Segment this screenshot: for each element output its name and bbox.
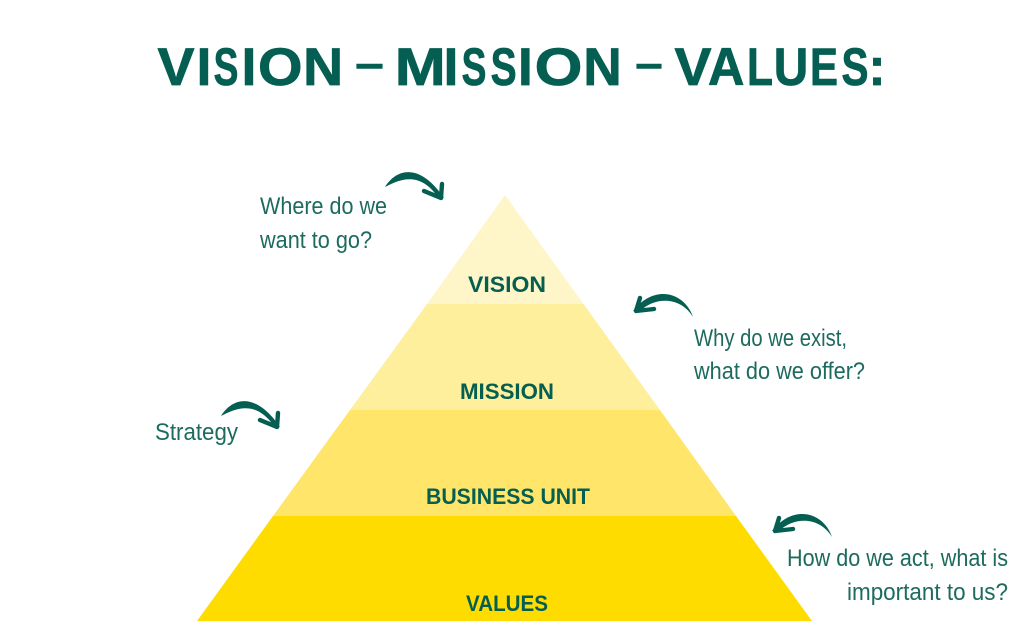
arrow: to values <box>772 514 832 537</box>
title: I <box>444 38 458 97</box>
pyramid tier: business unit: BUSINESS UNIT <box>426 484 591 509</box>
title: S <box>491 38 517 97</box>
title: N <box>583 38 622 97</box>
text: why do we exist <box>693 325 865 385</box>
title: A <box>708 38 744 97</box>
arrow: to business unit <box>221 401 280 427</box>
pyramid tier: business unit <box>273 410 736 516</box>
pyramid tier: mission <box>350 304 660 410</box>
callout: where do we want to go <box>259 172 444 254</box>
callout: how do we act <box>772 514 1008 606</box>
title: U <box>774 38 808 97</box>
title: : <box>868 38 886 97</box>
callout: why do we exist <box>633 294 865 385</box>
title: S <box>462 38 486 97</box>
text: where do we want to go: Where do we <box>260 193 387 220</box>
title: O <box>535 38 582 97</box>
title: S <box>214 38 238 97</box>
text: where do we want to go: want to go? <box>259 227 372 254</box>
pyramid tier: values <box>197 516 812 621</box>
title: L <box>747 38 773 97</box>
pyramid tier: values: VALUES <box>466 591 548 616</box>
text: how do we act: important to us? <box>847 579 1008 606</box>
pyramid tier: vision: VISION <box>468 272 546 297</box>
text: how do we act <box>787 545 1008 606</box>
pyramid tier: vision <box>427 195 584 304</box>
title: – <box>637 32 661 92</box>
title: N <box>303 38 343 97</box>
pyramid <box>197 195 812 621</box>
title: S <box>842 38 868 97</box>
callout: strategy <box>155 401 280 446</box>
title: I <box>242 38 256 97</box>
arrow: to mission <box>633 294 693 317</box>
title: V <box>674 38 712 97</box>
title: I <box>518 38 533 97</box>
title: M <box>395 38 446 97</box>
title: I <box>197 38 211 97</box>
pyramid tier: mission: MISSION <box>460 379 554 404</box>
title: – <box>357 32 382 92</box>
arrow: to vision <box>385 172 444 198</box>
text: where do we want to go <box>259 193 387 254</box>
title <box>158 32 886 97</box>
text: why do we exist: Why do we exist, <box>694 325 847 352</box>
text: why do we exist: what do we offer? <box>693 358 865 385</box>
title: E <box>810 38 838 97</box>
text: strategy: Strategy <box>155 419 238 446</box>
title: V <box>158 38 194 97</box>
title: O <box>258 38 302 97</box>
